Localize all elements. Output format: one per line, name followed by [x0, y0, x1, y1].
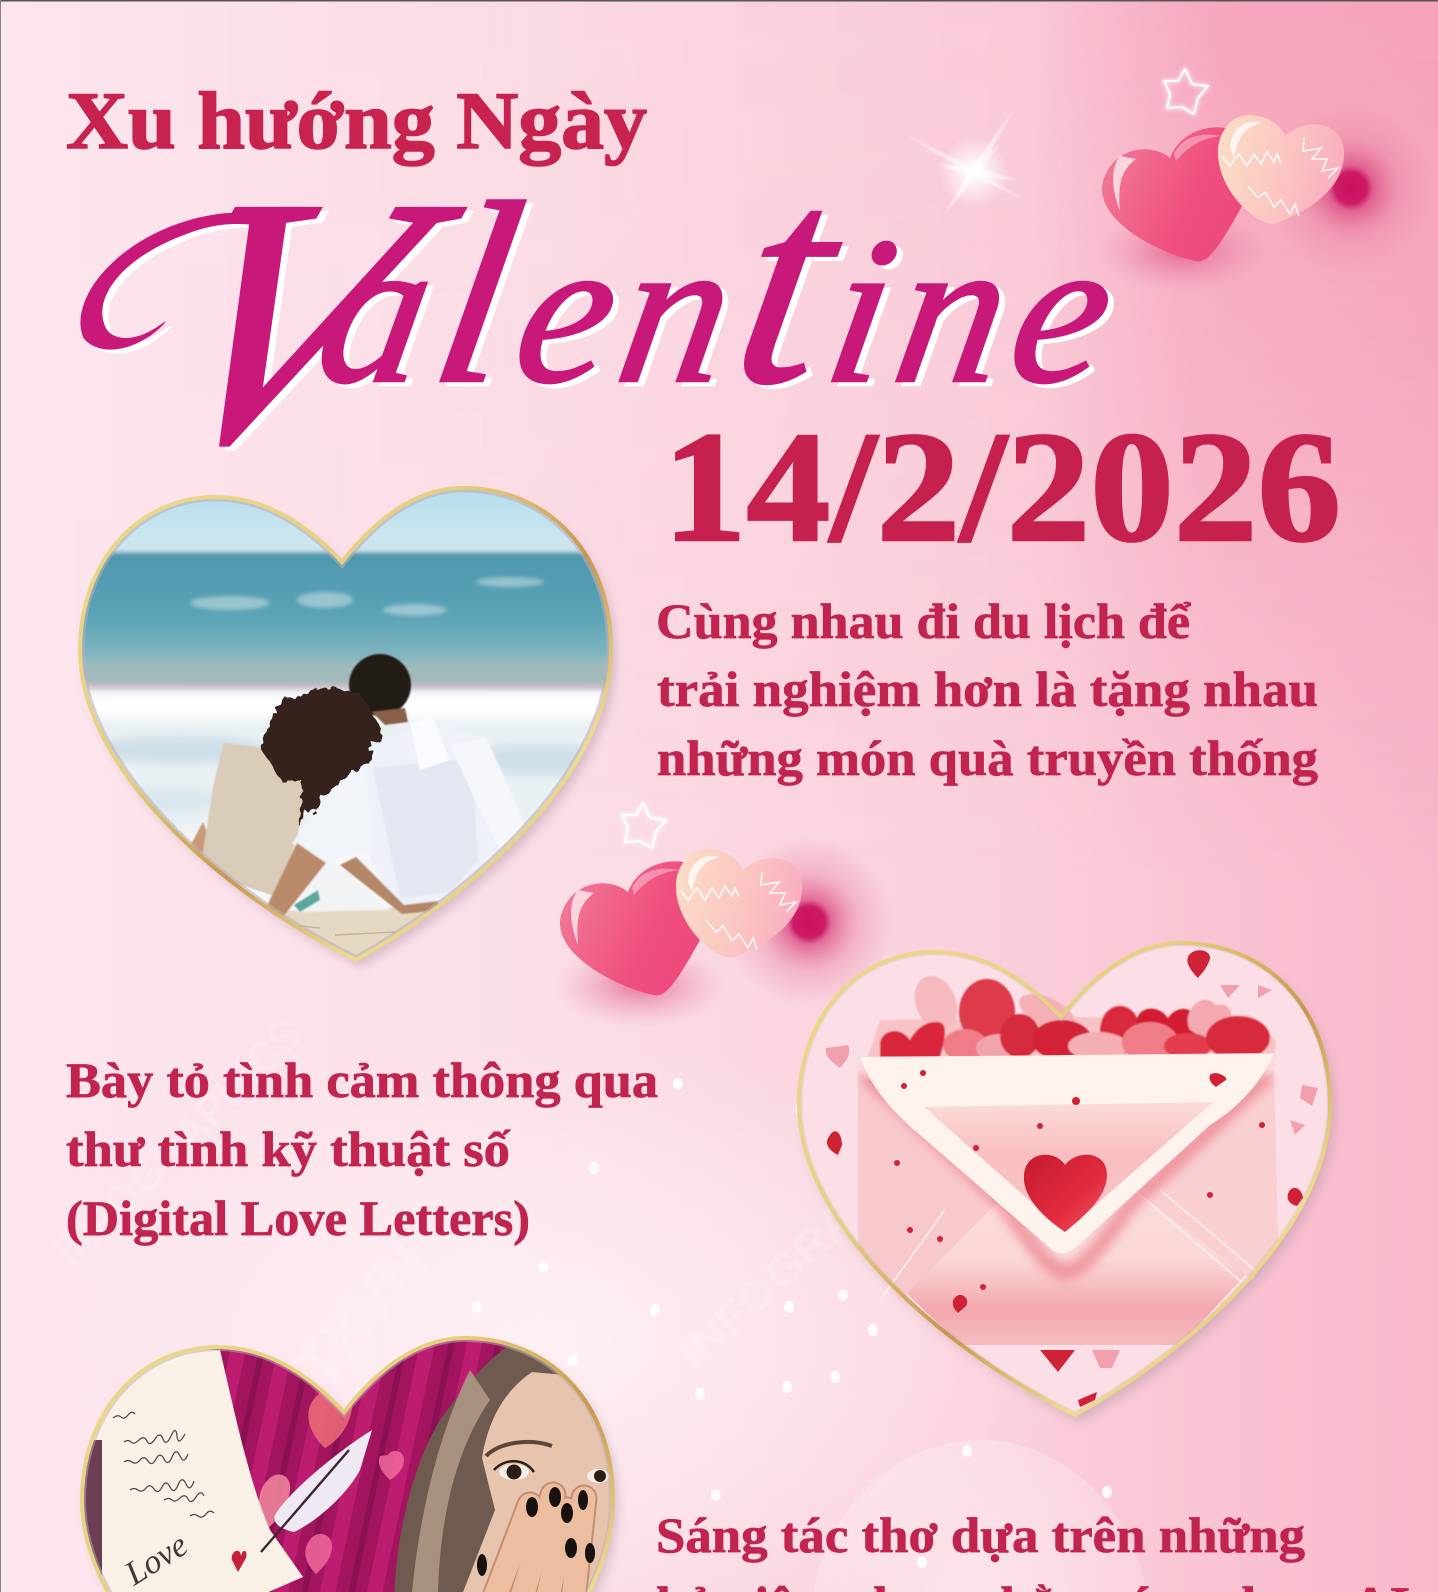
envelope body	[858, 1053, 1278, 1345]
watermarks: INFOGRAPHICS	[669, 1093, 977, 1377]
text block 1: Cùng nhau đi du lịch để	[656, 593, 1192, 649]
watermarks: TTXVN	[258, 1229, 441, 1429]
pink hearts	[259, 1386, 404, 1574]
scattered pink hearts	[826, 985, 1318, 1368]
paper	[70, 1340, 303, 1592]
photo heart: couple on beach	[60, 470, 640, 980]
"Love" note: Love	[118, 1526, 194, 1592]
couple figures	[189, 654, 529, 918]
title: Xu hướng Ngày: Xu hướng Ngày	[66, 75, 647, 166]
title: Valentine script: V	[109, 129, 506, 521]
watermarks: TTXVN	[973, 1223, 1170, 1410]
text block 1: trải nghiệm hơn là tặng nhau	[657, 661, 1318, 717]
wax heart	[1024, 1155, 1107, 1232]
photo heart: envelope	[799, 943, 1335, 1422]
text block 2: Bày tỏ tình cảm thông qua	[66, 1052, 658, 1108]
face	[460, 1372, 620, 1592]
woman hair	[260, 686, 382, 826]
watermarks: INFOGRAPHICS	[44, 1009, 312, 1277]
text block 2: thư tình kỹ thuật số	[66, 1121, 511, 1177]
text block 3	[656, 1507, 1410, 1592]
sea and sky	[82, 490, 609, 834]
title: Valentine script: V	[103, 125, 500, 517]
brow and eyes	[486, 1442, 552, 1456]
title: Valentine script: alentine	[300, 115, 1154, 446]
black nails	[477, 1487, 595, 1576]
magenta backdrop	[207, 1340, 508, 1592]
title: Valentine script	[81, 115, 1160, 521]
sand	[284, 908, 428, 958]
title: Valentine script: alentine	[306, 119, 1160, 450]
hearts spilling out of envelope	[868, 970, 1276, 1062]
feather	[275, 1430, 372, 1532]
decorative hearts middle	[555, 803, 893, 1027]
text block 2	[66, 1052, 658, 1246]
text block 1	[656, 593, 1318, 786]
date: 14/2/2026	[663, 400, 1341, 575]
envelope flap	[860, 1054, 1274, 1253]
text block 3: Sáng tác thơ dựa trên những	[656, 1507, 1305, 1563]
hair	[394, 1346, 560, 1592]
scattered red hearts	[827, 950, 1303, 1407]
watermarks	[44, 1009, 1170, 1429]
handwriting	[113, 1412, 214, 1517]
hands	[490, 1495, 584, 1592]
text block 2: (Digital Love Letters)	[66, 1190, 530, 1246]
sparkle	[904, 110, 1024, 214]
bokeh lights	[472, 1078, 1112, 1568]
photo heart: woman and love letter	[70, 1330, 630, 1592]
surf	[85, 659, 606, 910]
flap shadow	[866, 1075, 1268, 1272]
text block 1: những món quà truyền thống	[657, 730, 1318, 786]
decorative hearts top right	[1097, 69, 1435, 293]
